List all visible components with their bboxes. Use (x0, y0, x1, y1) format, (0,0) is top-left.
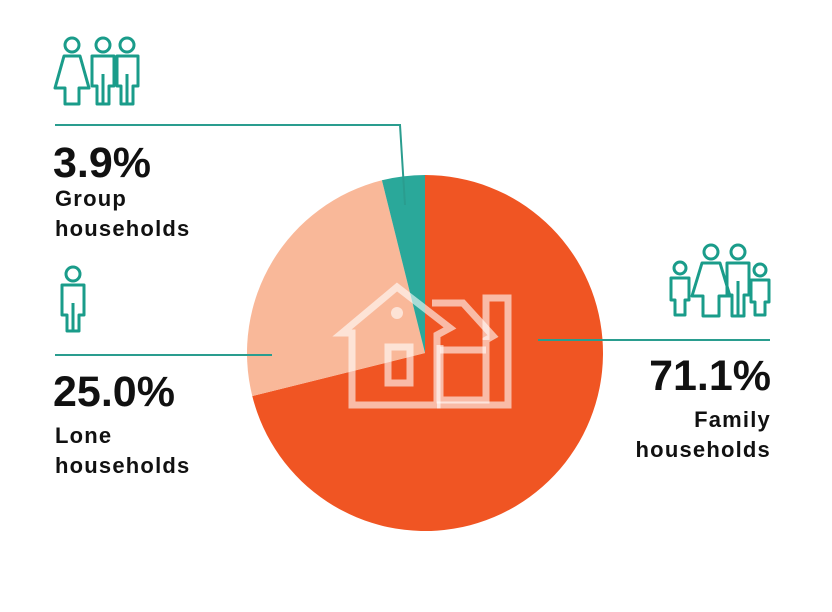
label: group households: households (55, 216, 190, 241)
label: lone households: households (55, 453, 190, 478)
label: family 71.1%: 71.1% (649, 352, 771, 400)
label: group 3.9%: 3.9% (53, 139, 151, 187)
icon: family people (671, 245, 769, 316)
label: lone 25.0%: 25.0% (53, 368, 175, 416)
slice: family 71.1% (252, 175, 603, 531)
pie chart (247, 175, 603, 531)
label: lone households: Lone (55, 423, 112, 448)
label: family households: Family (694, 407, 771, 432)
label: family households (636, 407, 771, 462)
label: group households: Group (55, 186, 127, 211)
label: group households (55, 186, 190, 241)
icon: group people (55, 38, 138, 104)
icon: houses (342, 287, 508, 405)
label: family households: households (636, 437, 771, 462)
icon: lone person (62, 267, 84, 331)
label: lone households (55, 423, 190, 478)
slice: group 3.9% (382, 175, 425, 353)
slice: lone 25.0% (247, 180, 425, 396)
leader lines (55, 125, 770, 355)
